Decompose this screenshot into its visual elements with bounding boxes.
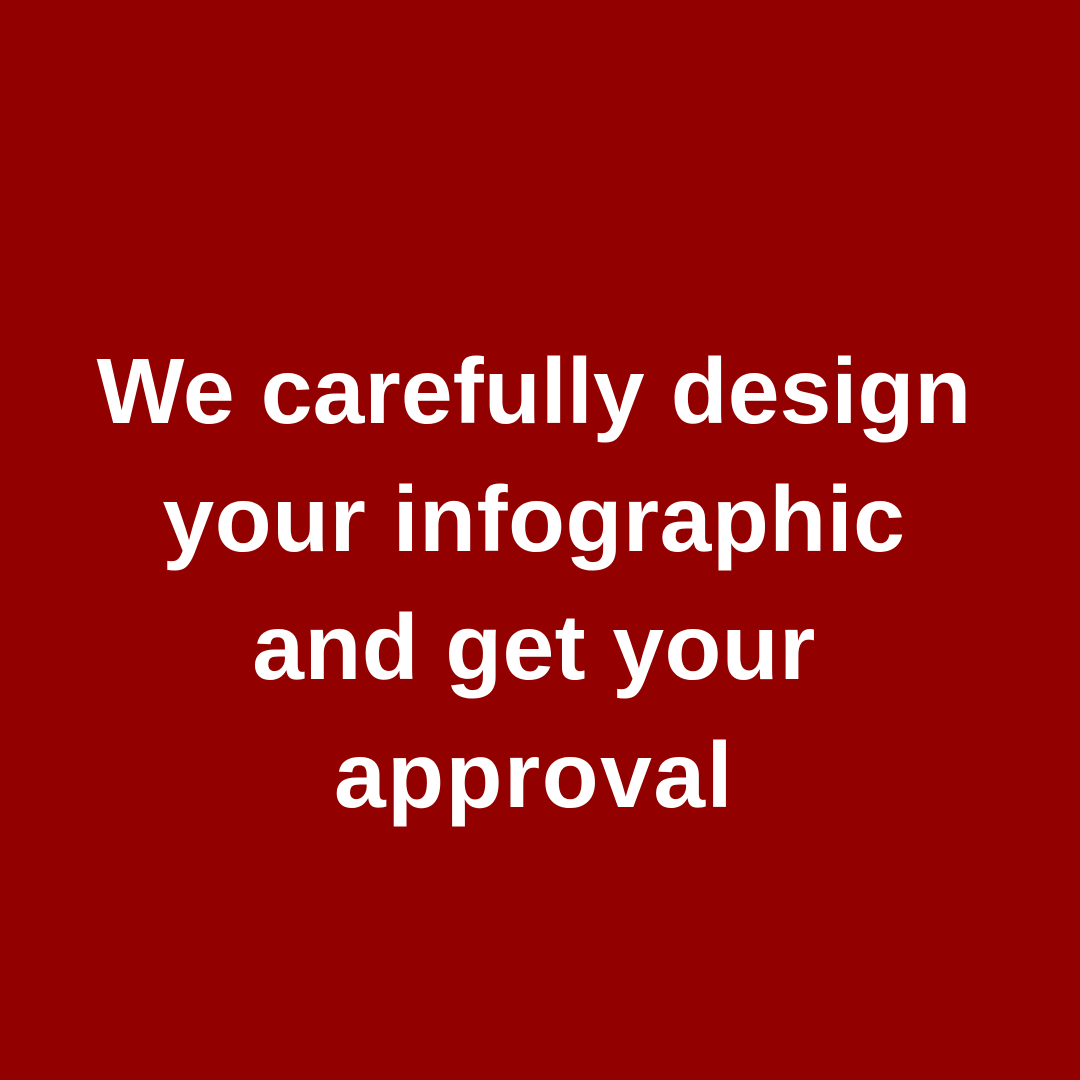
title <box>96 339 971 827</box>
title: and get your <box>252 595 816 699</box>
title: your infographic <box>162 467 905 571</box>
title: approval <box>334 723 734 827</box>
title: We carefully design <box>97 339 971 443</box>
